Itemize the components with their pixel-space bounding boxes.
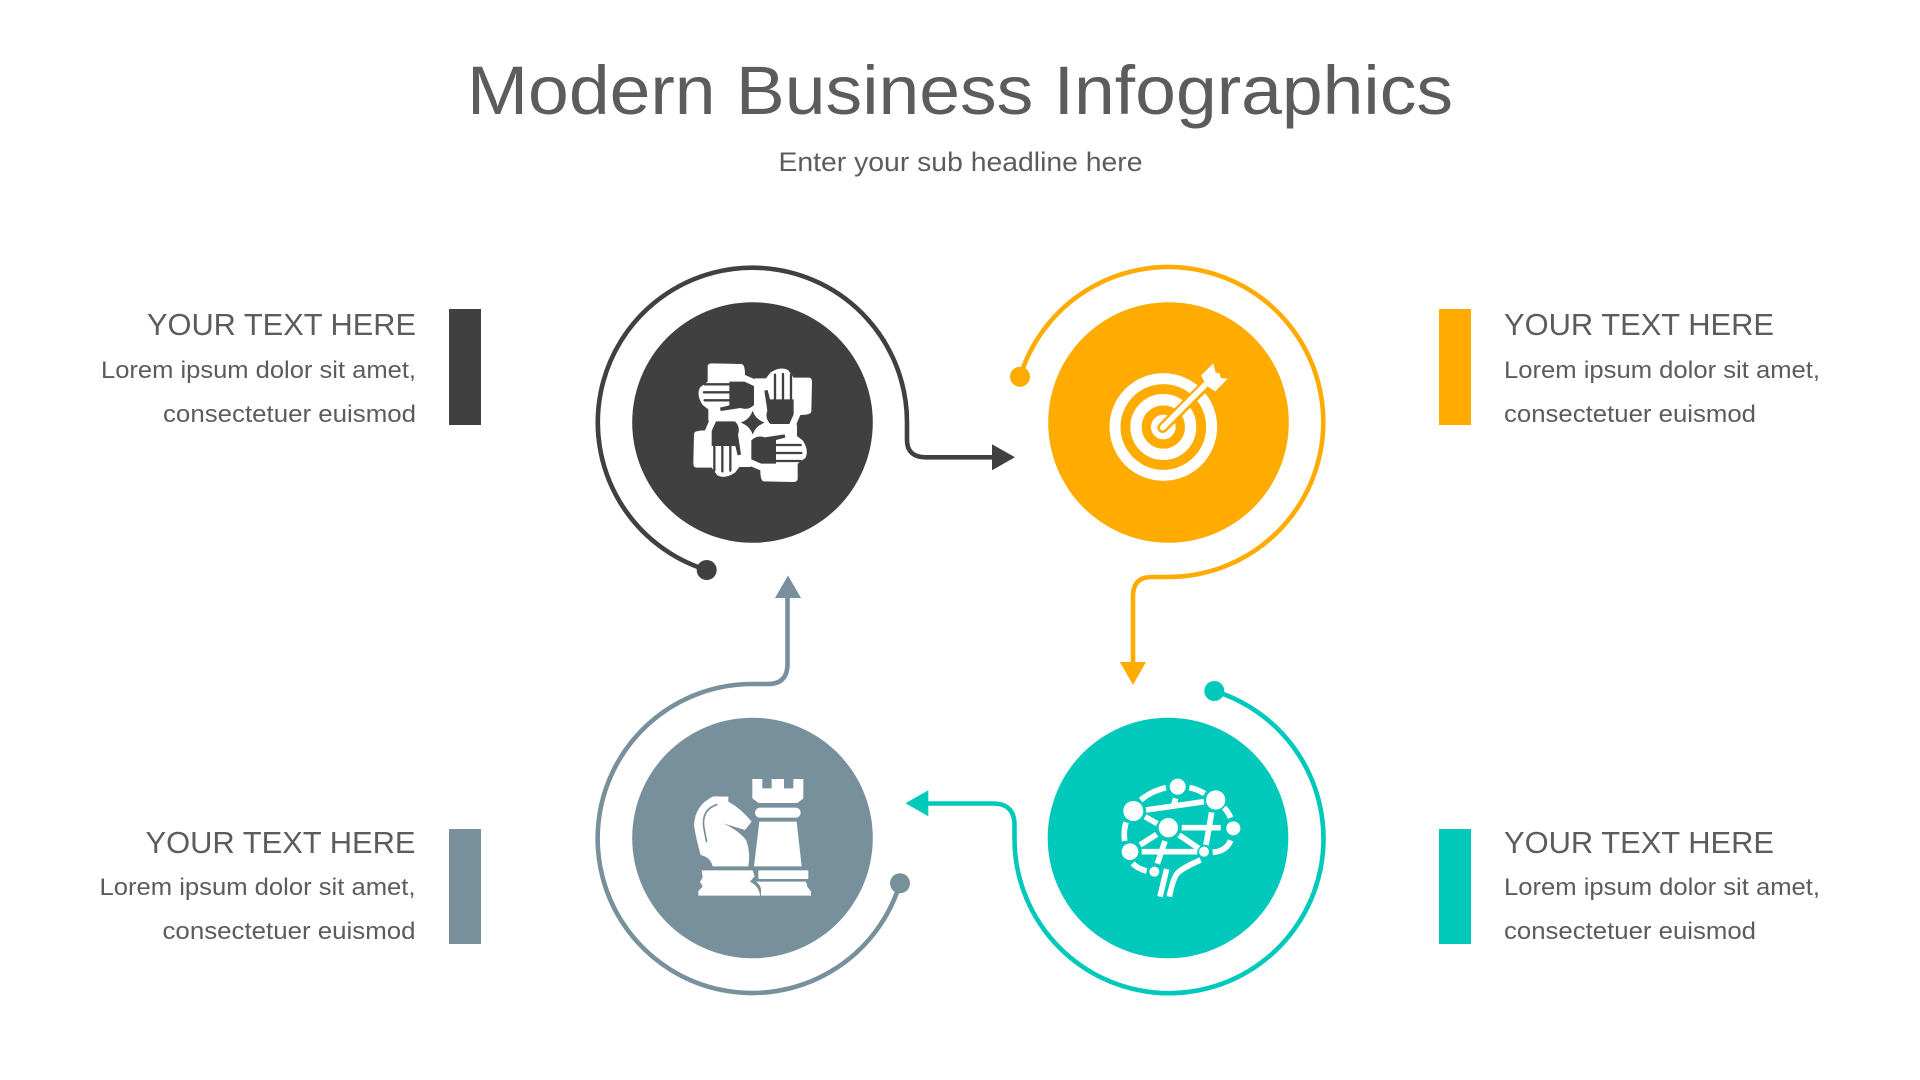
node: target (orange) [1010, 267, 1323, 685]
arrow: orange ring to brain [1010, 267, 1323, 685]
title: Modern Business Infographics [467, 52, 1453, 129]
text block: top right [1504, 357, 1820, 428]
text block: bottom right: consectetuer euismod [1504, 918, 1756, 945]
text block: top right: Lorem ipsum dolor sit amet, [1504, 357, 1820, 384]
panel: top right text [1439, 307, 1820, 428]
arrow: dark ring to target [598, 268, 1015, 580]
subtitle: Enter your sub headline here [778, 147, 1142, 177]
accent bar: orange [1439, 309, 1471, 425]
icon: target with arrow [1115, 363, 1228, 475]
circle: orange [1048, 302, 1289, 543]
arrow: steel ring to teamwork [598, 576, 910, 993]
heading: bottom left: YOUR TEXT HERE [146, 825, 416, 860]
text block: bottom left: Lorem ipsum dolor sit amet, [100, 874, 416, 901]
heading: bottom right: YOUR TEXT HERE [1504, 825, 1774, 860]
panel: bottom left text [100, 825, 481, 945]
text block: top left: consectetuer euismod [163, 401, 416, 428]
circle: teal [1048, 718, 1288, 958]
accent bar: teal [1439, 829, 1471, 944]
text block: top left [101, 357, 416, 428]
accent bar: steel [449, 829, 481, 944]
accent bar: dark [449, 309, 481, 425]
text block: top left: Lorem ipsum dolor sit amet, [101, 357, 416, 384]
heading: top right: YOUR TEXT HERE [1504, 307, 1774, 342]
arrow: teal ring to strategy [906, 681, 1323, 993]
node: teamwork (dark) [598, 268, 1015, 580]
text block: bottom right: Lorem ipsum dolor sit amet, [1504, 874, 1820, 901]
text block: bottom left [100, 874, 416, 945]
node: brain (teal) [906, 681, 1323, 993]
heading: top left: YOUR TEXT HERE [147, 307, 416, 342]
panel: bottom right text [1439, 825, 1820, 945]
text block: top right: consectetuer euismod [1504, 401, 1756, 428]
icon: chess knight and rook [694, 779, 811, 896]
circle: steel [632, 718, 873, 958]
node: strategy (steel) [598, 576, 910, 993]
panel: top left text [101, 307, 481, 428]
icon: brain network [1122, 779, 1240, 897]
text block: bottom left: consectetuer euismod [162, 918, 416, 945]
icon: four hands [693, 363, 812, 482]
circle: dark [632, 302, 873, 543]
text block: bottom right [1504, 874, 1820, 945]
